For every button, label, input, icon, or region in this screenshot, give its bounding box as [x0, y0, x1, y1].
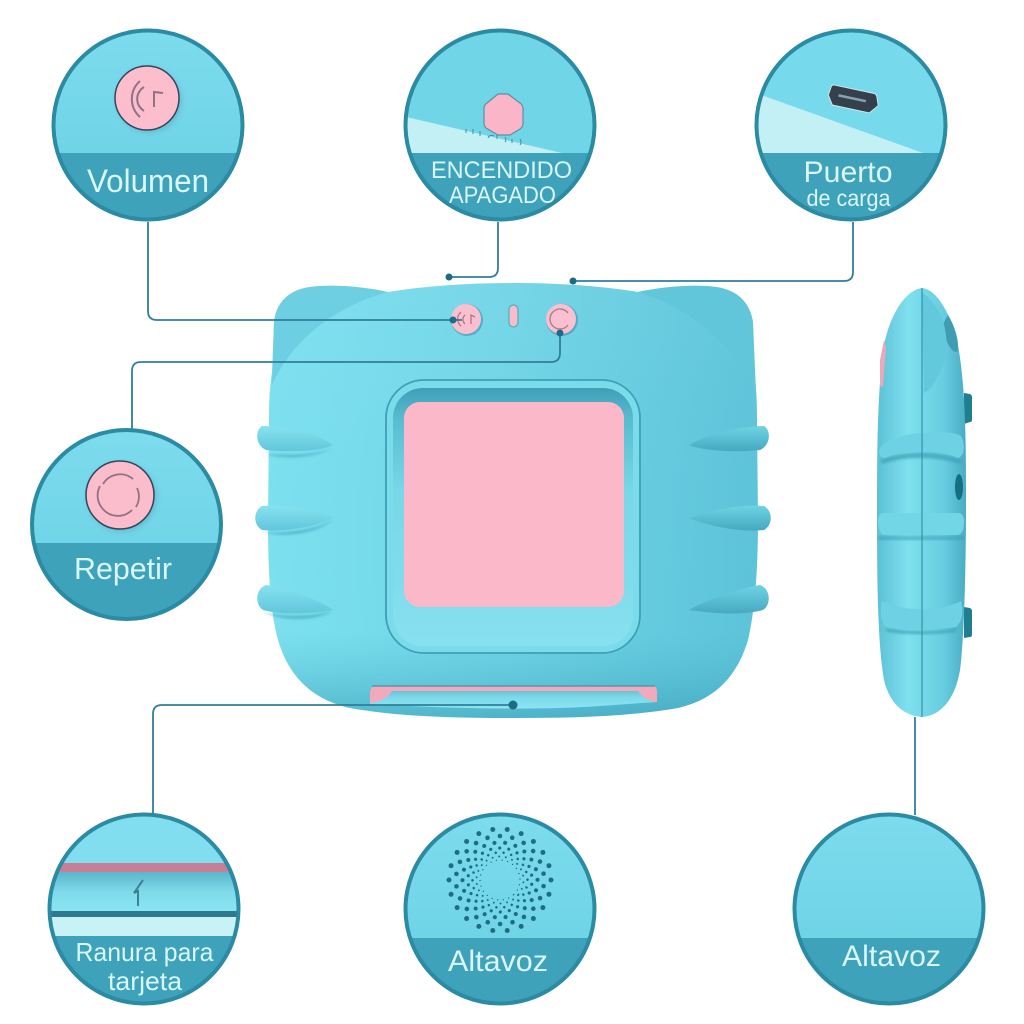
callout: Repetir [30, 428, 226, 624]
cat ears [272, 286, 388, 385]
label: Volumen [87, 163, 209, 199]
connector lines [132, 222, 915, 815]
screen frame [386, 380, 640, 653]
pink edge [880, 340, 886, 387]
label [76, 937, 214, 996]
label: APAGADO [449, 182, 556, 209]
icon: usb port [826, 84, 880, 114]
connector: power [449, 222, 498, 277]
connector end dots [446, 274, 576, 710]
label: Repetir [74, 551, 172, 586]
callout: side speaker [791, 812, 987, 1010]
callout: card slot [46, 812, 242, 1008]
callout: power [402, 28, 598, 228]
callout: speaker grille [402, 812, 598, 1010]
side body [877, 288, 966, 717]
icon: volume button [115, 66, 181, 132]
label: de carga [806, 185, 891, 211]
centre seam [921, 288, 923, 717]
volume button [451, 304, 483, 336]
connector: volume [148, 222, 462, 320]
device body [268, 283, 758, 718]
label: Ranura para [76, 937, 214, 967]
side ear [942, 315, 958, 352]
icon: power button [484, 94, 523, 135]
label: Puerto [804, 156, 892, 189]
side view of the device [877, 288, 972, 717]
pink screen [404, 402, 624, 607]
icon: repeat button [86, 461, 156, 531]
side ridges [878, 432, 964, 634]
front view of the device [255, 283, 771, 718]
label: tarjeta [108, 966, 183, 996]
connector: side speaker [914, 717, 916, 815]
speaker hole [955, 474, 963, 500]
label [431, 157, 572, 209]
connector: charging port [573, 222, 853, 281]
label: ENCENDIDO [431, 157, 572, 184]
connector: repeat [132, 333, 560, 430]
icon: insert arrow [134, 880, 143, 906]
label: Altavoz [842, 940, 941, 973]
engraved mark [466, 129, 521, 145]
label: Altavoz [448, 945, 548, 978]
callout: Volumen [50, 28, 246, 228]
icon: speaker dots [449, 829, 551, 931]
callout: charging port [753, 28, 949, 228]
indicator light [509, 305, 518, 327]
card slot [370, 686, 657, 709]
side ridges [255, 426, 771, 619]
rear feet [964, 393, 972, 638]
repeat button [546, 304, 578, 336]
label [804, 156, 892, 211]
connector: card slot [153, 705, 513, 813]
